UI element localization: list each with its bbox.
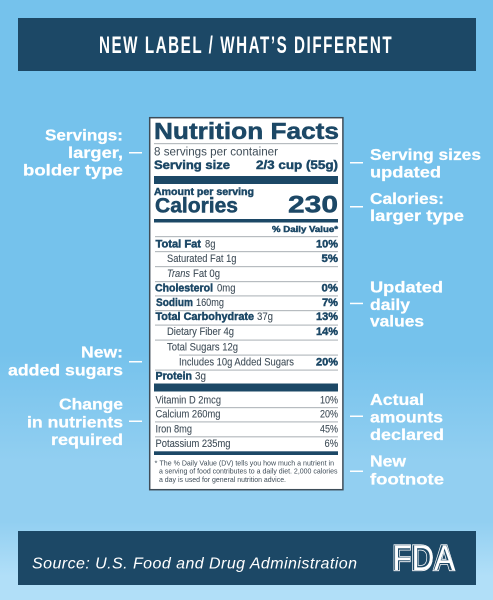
row: cholesterol: 0mg	[217, 283, 236, 295]
callout: serving sizes: updated	[370, 164, 441, 181]
footnote: *	[154, 458, 158, 467]
serving size	[154, 160, 338, 172]
row: trans fat: Fat 0g	[193, 268, 220, 280]
row: iron: 45%	[320, 424, 338, 436]
callout: daily values: daily	[370, 297, 410, 314]
row: vitamin d: Vitamin D 2mcg	[156, 394, 221, 406]
row: total sugars: Total Sugars 12g	[167, 342, 238, 354]
row: potassium	[156, 438, 338, 450]
callout: daily values: Updated	[370, 279, 443, 296]
callout: actual amounts: declared	[370, 427, 444, 444]
row: total carbohydrate	[156, 311, 338, 323]
row: dietary fiber: 14%	[316, 326, 338, 338]
row: sodium: Sodium	[156, 297, 193, 309]
footnote: a serving of food contributes to a daily diet. 2,000 calories	[159, 467, 338, 476]
panel: nutrition facts label	[150, 118, 343, 490]
row: total fat: 10%	[316, 239, 338, 251]
callout: nutrients	[27, 397, 142, 449]
callout: calories	[350, 191, 464, 225]
daily value header: % Daily Value*	[272, 224, 339, 234]
callout: servings: larger,	[68, 145, 123, 162]
row: iron	[156, 424, 338, 436]
callout: servings: Servings:	[45, 128, 123, 144]
row: trans fat: Trans	[167, 268, 190, 280]
row: trans fat	[167, 268, 220, 280]
row: added sugars: Includes 10g Added Sugars	[179, 356, 294, 368]
source text: Source: U.S. Food and Drug Administration	[32, 556, 357, 572]
callout: added sugars: New:	[81, 345, 123, 362]
row: calcium	[156, 409, 338, 421]
callout: serving sizes: Serving sizes	[370, 147, 481, 164]
row: total carbohydrate: 37g	[257, 311, 273, 323]
row: cholesterol: Cholesterol	[155, 283, 213, 295]
source banner	[18, 531, 476, 585]
serving size: Serving size	[154, 160, 230, 172]
callout: actual amounts: amounts	[370, 410, 443, 427]
callout: nutrients: required	[51, 432, 123, 449]
row: protein: 3g	[195, 370, 206, 382]
row: vitamin d: 10%	[320, 394, 338, 406]
callout: daily values	[350, 279, 443, 331]
callout: actual amounts: Actual	[370, 392, 424, 409]
row: total carbohydrate: 13%	[316, 311, 338, 323]
callout: nutrients: in nutrients	[27, 414, 123, 431]
callout: daily values: values	[370, 314, 424, 331]
row: cholesterol	[155, 283, 338, 295]
heading: nutrition facts: Nutrition Facts	[154, 118, 339, 144]
row: dietary fiber	[167, 326, 338, 338]
callout: footnote	[350, 454, 444, 488]
title banner	[18, 18, 476, 71]
callout: servings: bolder type	[23, 162, 123, 180]
callout: serving sizes	[350, 147, 481, 181]
callout: footnote: New	[370, 454, 407, 471]
row: sodium: 160mg	[196, 297, 224, 309]
icon: FDA logo: FDA	[392, 539, 455, 578]
row: added sugars: 20%	[316, 356, 338, 368]
calories: Calories	[155, 194, 238, 218]
title: NEW LABEL / WHAT’S DIFFERENT	[99, 33, 392, 59]
row: saturated fat	[167, 253, 338, 265]
callout: calories: larger type	[370, 208, 464, 225]
row: sodium	[156, 297, 338, 309]
callout: nutrients: Change	[59, 397, 123, 414]
serving size: 2/3 cup (55g)	[256, 160, 338, 172]
row: total carbohydrate: Total Carbohydrate	[156, 311, 254, 323]
callout: footnote: footnote	[370, 471, 444, 488]
callout: actual amounts	[350, 392, 444, 444]
row: cholesterol: 0%	[322, 283, 338, 295]
amount per serving: Amount per serving	[154, 187, 254, 198]
row: total fat: Total Fat	[156, 239, 201, 251]
row: dietary fiber: Dietary Fiber 4g	[167, 326, 234, 338]
icon: FDA logo: FDA	[392, 539, 456, 578]
row: saturated fat: 5%	[322, 253, 338, 265]
row: iron: Iron 8mg	[156, 424, 192, 436]
row: vitamin d	[156, 394, 338, 406]
row: total fat: 8g	[205, 239, 216, 251]
row: calcium: Calcium 260mg	[156, 409, 220, 421]
footnote: a day is used for general nutrition advice.	[159, 475, 286, 484]
row: potassium: Potassium 235mg	[156, 438, 230, 450]
footnote: The % Daily Value (DV) tells you how much a nutrient in	[160, 458, 334, 467]
footnote	[154, 458, 338, 484]
row: total fat	[156, 239, 338, 251]
callout: added sugars	[8, 345, 142, 380]
row: calcium: 20%	[320, 409, 338, 421]
calories	[155, 192, 338, 218]
calories: 230	[288, 192, 338, 218]
row: protein: Protein	[156, 370, 192, 382]
row: saturated fat: Saturated Fat 1g	[167, 253, 236, 265]
callout: servings	[23, 128, 142, 180]
row: potassium: 6%	[324, 438, 338, 450]
callout: calories: Calories:	[370, 191, 444, 208]
servings per container: 8 servings per container	[154, 146, 278, 158]
row: sodium: 7%	[322, 297, 338, 309]
callout: added sugars: added sugars	[8, 362, 123, 380]
icon: FDA logo: FDA	[392, 539, 455, 578]
